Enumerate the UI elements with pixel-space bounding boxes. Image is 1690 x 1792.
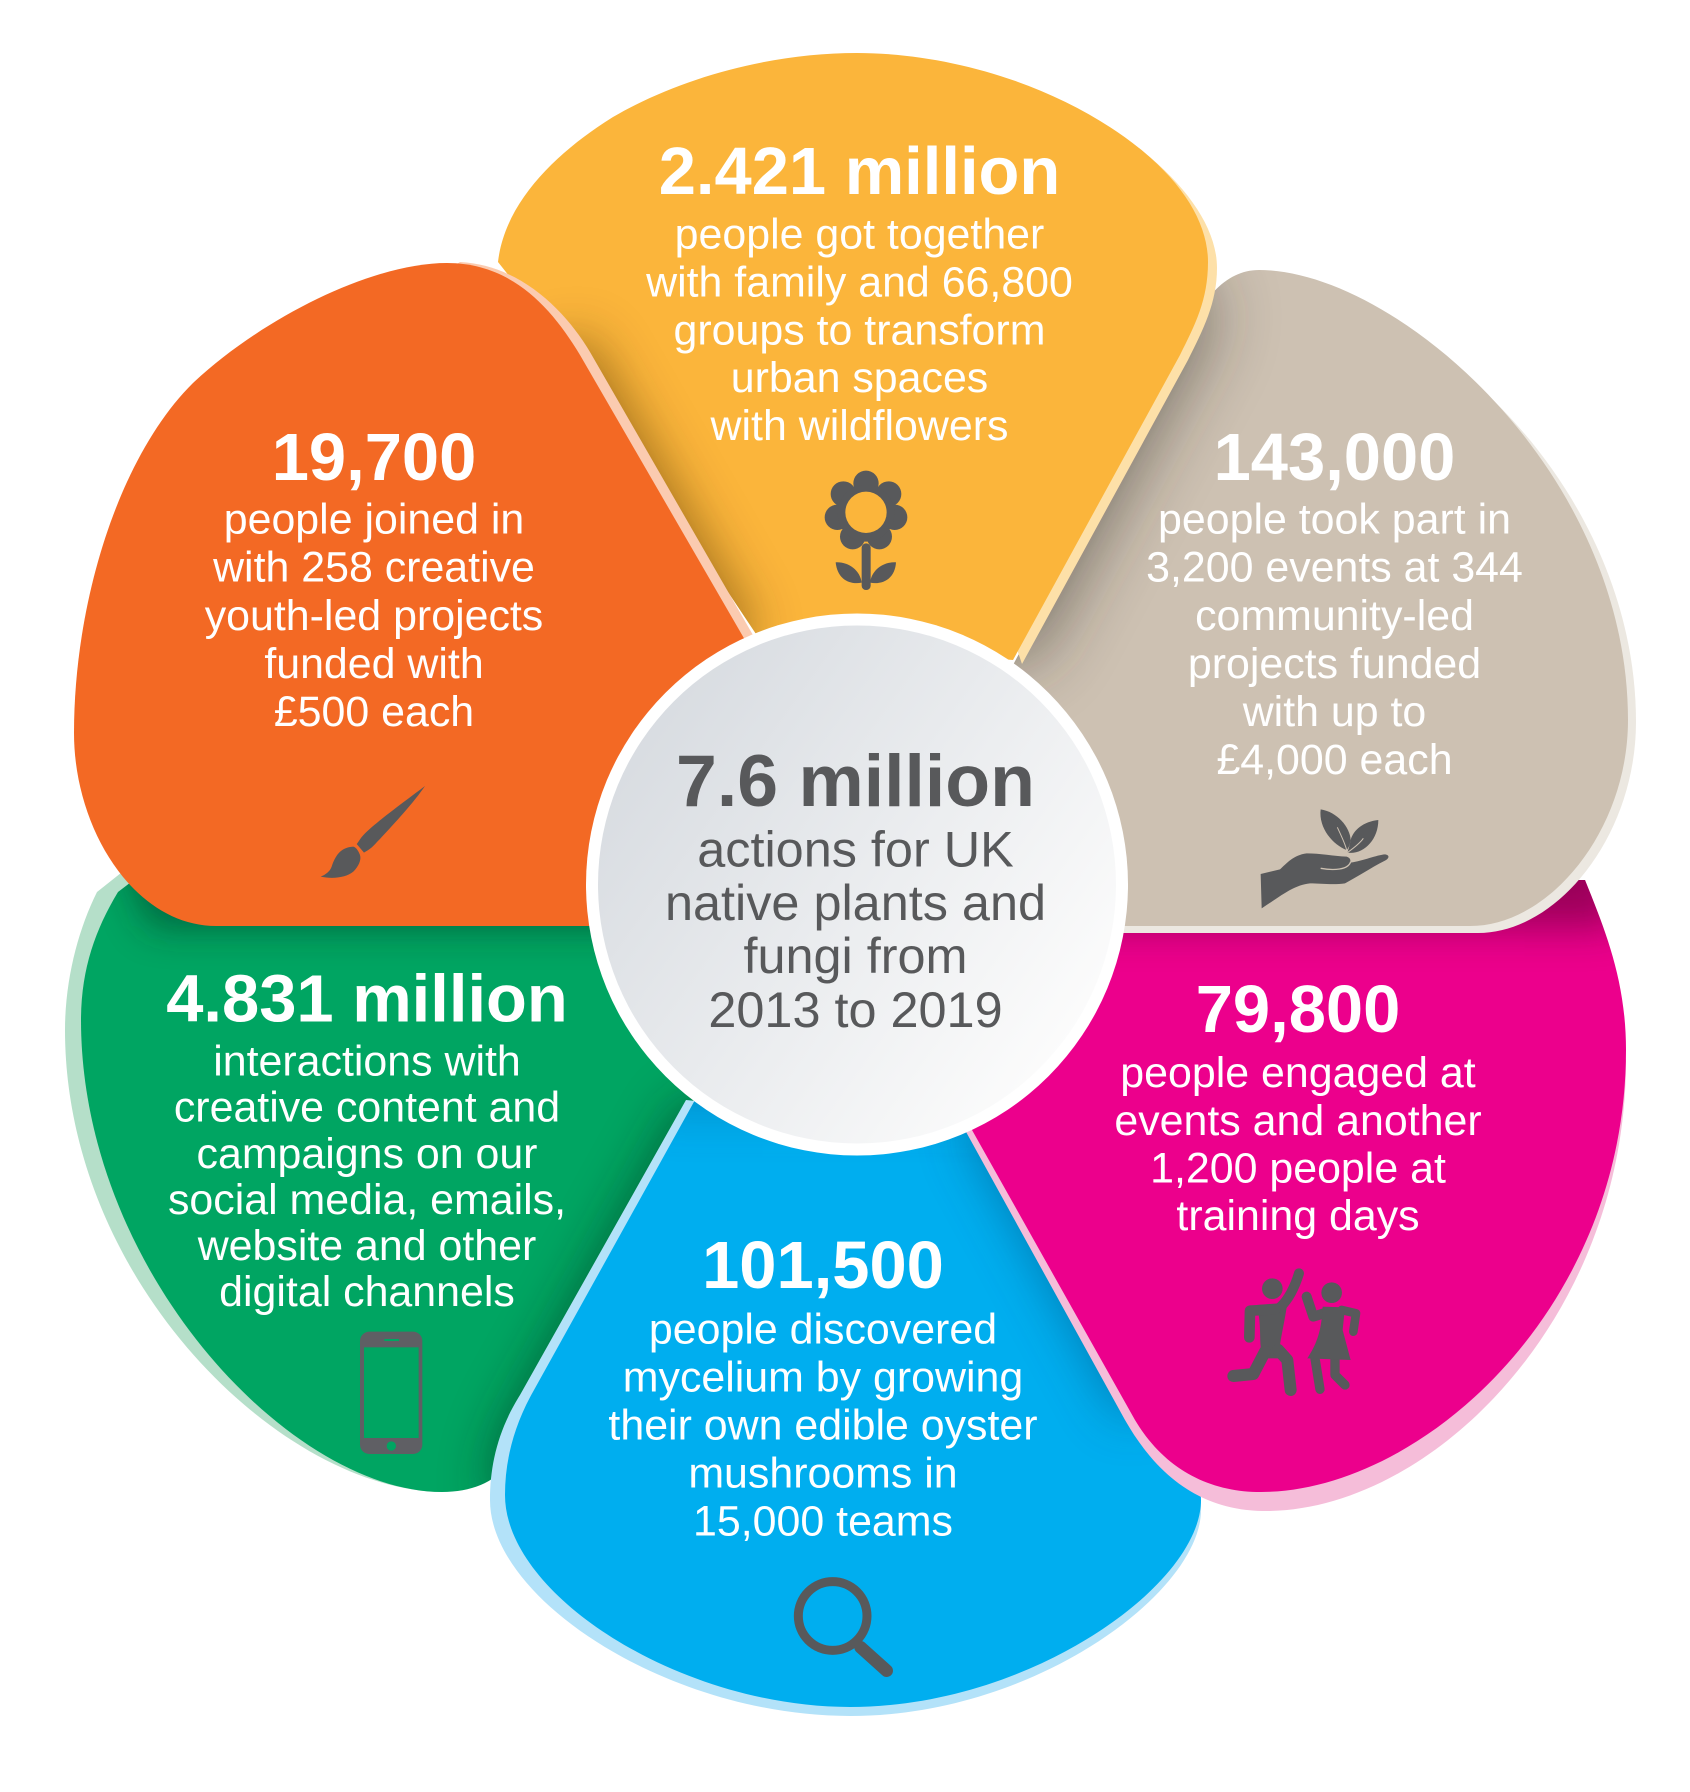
text: mycelium description: people discovered (649, 1306, 997, 1354)
text: interactions description: interactions with (213, 1038, 521, 1086)
text: centre description: native plants and (665, 874, 1046, 931)
icon: dancing people (1233, 1273, 1356, 1390)
text: youth-led projects description: funded with (264, 640, 484, 688)
text: community projects description: 3,200 events at 344 (1146, 544, 1523, 592)
heading: 101,500: 101,500 (702, 1228, 944, 1303)
icon: paintbrush (321, 786, 425, 878)
text: youth-led projects description: youth-led projects (205, 592, 543, 640)
text: community projects description: £4,000 each (1216, 736, 1453, 784)
text: interactions description: creative content and (174, 1084, 560, 1132)
text: mycelium description: their own edible oyster (608, 1402, 1038, 1450)
text: community projects description: with up to (1242, 688, 1426, 736)
panel: beige petal, community-led projects (1014, 270, 1636, 933)
text: events description: events and another (1114, 1097, 1482, 1145)
heading: 2.421 million: 2.421 million (659, 134, 1060, 209)
text: youth-led projects description: people joined in (224, 496, 524, 544)
heading: 19,700: 19,700 (272, 420, 476, 495)
text: centre description: fungi from (743, 927, 968, 984)
heading: 4.831 million: 4.831 million (166, 962, 568, 1036)
panel: centre circle, 7.6 million actions (586, 614, 1128, 1156)
text: youth-led projects description: with 258 creative (212, 544, 535, 592)
text: interactions description: campaigns on our (197, 1130, 537, 1178)
text: interactions description: social media, emails, (168, 1176, 566, 1224)
text: community projects description: community-led (1195, 592, 1474, 640)
text: wildflowers description: urban spaces (731, 354, 988, 402)
petal shape: green (81, 860, 700, 1492)
text: wildflowers description: with wildflowers (710, 402, 1008, 450)
panel: blue petal, mycelium (490, 1100, 1201, 1716)
panel: yellow petal, wildflowers (498, 53, 1217, 664)
text: wildflowers description: with family and 66,800 (645, 258, 1073, 306)
text: wildflowers description: people got together (675, 210, 1044, 258)
text: mycelium description: mycelium by growing (623, 1354, 1023, 1402)
petal shape: pink (972, 880, 1626, 1492)
centre circle fill (598, 626, 1116, 1144)
panel: pink petal, events and training (966, 880, 1626, 1511)
text: centre description: 2013 to 2019 (708, 981, 1003, 1038)
petal shape: yellow (498, 53, 1208, 660)
panel: green petal, digital interactions (65, 874, 694, 1492)
text: events description: 1,200 people at (1150, 1144, 1446, 1192)
icon: smartphone (360, 1332, 422, 1454)
icon: hand holding plant (1261, 809, 1388, 908)
heading: 79,800: 79,800 (1196, 972, 1400, 1047)
petal shape: beige (1000, 270, 1628, 926)
text: community projects description: people took part in (1158, 496, 1511, 544)
text: interactions description: digital channels (219, 1268, 515, 1316)
text: centre description: actions for UK (697, 820, 1014, 878)
text: youth-led projects description: £500 each (274, 688, 474, 736)
icon: flower (825, 471, 907, 590)
text: community projects description: projects funded (1188, 640, 1481, 688)
petal shape: blue (505, 1100, 1201, 1707)
heading: 7.6 million: 7.6 million (676, 740, 1035, 822)
icon: magnifying glass (798, 1582, 887, 1671)
text: events description: training days (1176, 1192, 1420, 1240)
text: events description: people engaged at (1120, 1049, 1476, 1097)
petal shape: orange (74, 263, 745, 926)
heading: 143,000: 143,000 (1214, 420, 1455, 495)
panel: orange petal, youth-led projects (74, 262, 757, 926)
text: wildflowers description: groups to transform (674, 306, 1045, 354)
text: mycelium description: mushrooms in (688, 1450, 958, 1498)
text: mycelium description: 15,000 teams (693, 1498, 953, 1546)
text: interactions description: website and other (197, 1222, 536, 1270)
